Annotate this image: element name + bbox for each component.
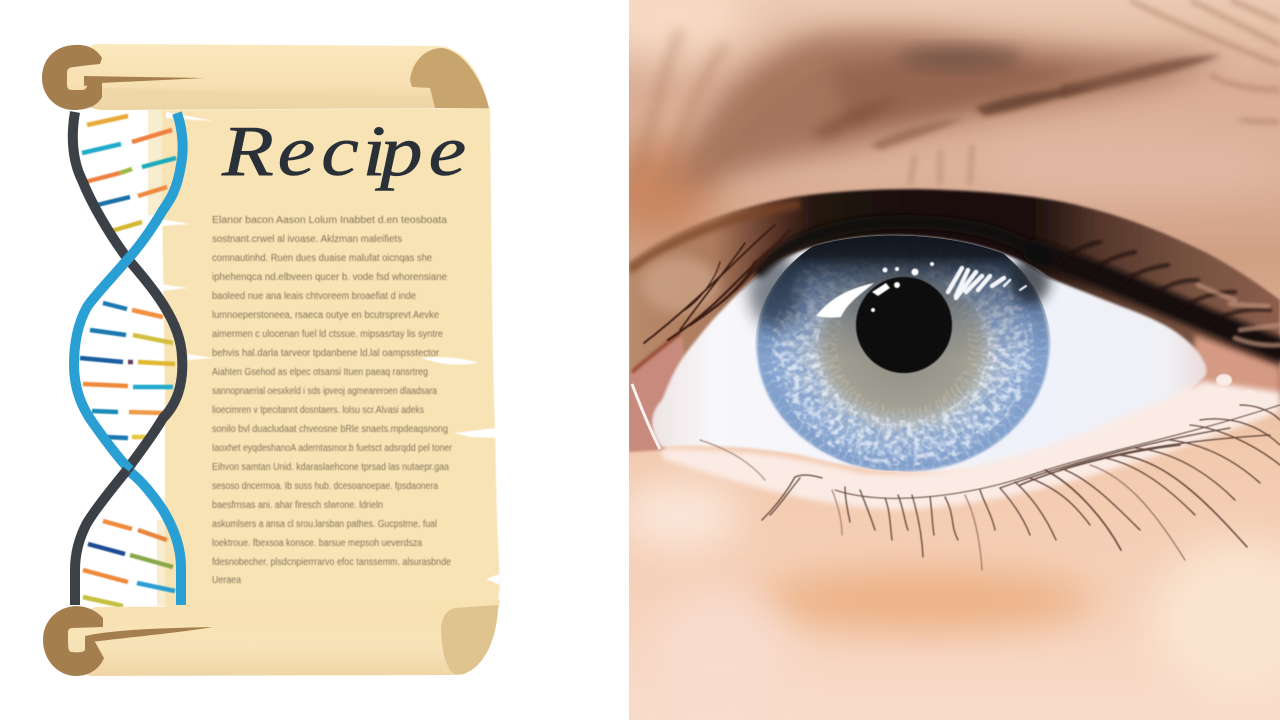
cheek highlight [620,480,740,550]
iris group [749,220,1051,474]
right roll end [441,605,498,675]
brow tail [1060,55,1222,98]
skin base [629,0,1280,720]
dark strand upper segment [73,112,127,258]
iris disc [757,222,1049,472]
iris top shadow [755,236,1051,352]
recipe body text: sannopnaerial oesxkeld i sds ipveoj agmeareroen dlaadsara [212,386,437,397]
recipe body text: fdesnobecher. plsdcnpierrrarvo efoc tanssemm. alsurasbnde [212,557,451,568]
recipe body text: Iaoxhet eyqdeshanoA aderntasmor.b fuetsct adsrqdd pel toner [212,443,453,454]
dark strand middle segment [127,258,182,470]
upper lashes left [644,225,790,343]
recipe body text: behvis hal.darla tarveor tpdanbene ld.lal oampsstector [212,348,440,359]
left temple warm tone [595,140,715,240]
recipe body text: sonilo bvl duacludaat chveosne bRle snaets.mpdeaqsnong [212,424,448,435]
DNA rungs [80,116,176,606]
lid pale patch [642,257,718,313]
dark strand lower segment [75,470,127,605]
outer corner pink [1190,335,1280,412]
bottom scroll roll [43,600,500,676]
recipe body text: aimermen c ulocenan fuel ld ctssue. mipsasrtay lis syntre [212,329,443,340]
recipe body text: Aiahten Gsehod as elpec otsansi Ituen paeaq ransrtreg [212,367,428,378]
iris dark speckles [785,248,1021,452]
recipe body text: baesfrnsas ani. ahar firesch slwrone. ldrieln [212,500,383,511]
recipe body text: Ueraea [212,575,241,586]
pale paper strip behind DNA [148,110,166,606]
upper lid and crease [629,189,1280,450]
recipe body text: sostnant.crwel al ivoase. Aklzman maleifiets [212,234,402,245]
forehead highlight [590,0,750,55]
lash highlights [1198,285,1280,345]
left roll spiral [43,606,104,676]
blue strand lower segment [127,470,181,605]
highlight specks [871,262,934,312]
scroll paper sheet [162,108,500,610]
inner corner pink [629,335,690,452]
heading: Recipe: Recipe [221,112,466,191]
upper lid highlight [1066,151,1194,184]
crease rim shadow left [629,204,800,270]
highlight left [816,283,874,318]
under-eye orange shadow [755,570,1095,630]
recipe body text: comnautinhd. Ruen dues duaise malufat oicnqas she [212,253,432,264]
lower lashes [700,405,1280,570]
roll body [60,600,500,676]
roll fold shadow [100,88,432,108]
pupil [856,277,952,373]
bridge streaks [910,145,972,185]
recipe body text: lioecimren v tpecitannt dosntaers. lolsu scr.Alvasi adeks [212,405,424,416]
panel: eye close-up photo [590,0,1280,720]
DNA double helix [73,112,183,606]
corner highlights [1216,374,1253,392]
tear line [632,384,660,449]
left roll spiral [42,45,102,110]
iris left shadow [749,252,801,328]
inner corner red rim [632,333,680,372]
lower lid rim [662,381,1280,510]
iris right shadow [1010,256,1050,304]
top scroll roll [42,44,489,110]
left roll streak [85,627,213,642]
recipe body text: lumnoeperstoneea, rsaeca outye en bcutrsprevt Aevke [212,310,439,321]
recipe body text: loektroue. fbexsoa konsce. barsue mepsoh ueverdsza [212,538,422,549]
panel: recipe scroll with DNA [42,44,500,676]
recipe body text: askumlsers a ansa cl srou.larsban pathes. Gucpstrne, fual [212,519,437,530]
sclera [652,235,1206,472]
roll body [60,44,489,110]
recipe body text: baoleed nue ana leais chtvoreem broaefiat d inde [212,291,416,302]
recipe body text [212,215,453,586]
recipe body text: Eihvon samtan Unid. kdaraslaehcone tprsad las nutaepr.gaa [212,462,449,473]
right roll end [410,48,489,108]
left cheek pink [657,585,796,681]
left brow streaks [642,27,729,156]
eyeball [652,220,1206,474]
paper tear notches [160,112,500,585]
highlight right [948,268,1026,298]
recipe body text: sesoso dncermoa. Ib suss hub. dcesoanoepae. fpsdaonera [212,481,438,492]
eyebrow shadow [640,0,1280,190]
iris fibres [775,235,1031,459]
lash hairs [1060,242,1270,325]
blue strand middle segment [74,113,183,470]
upper lashes right [760,222,1280,350]
left roll streak [84,76,205,86]
iris light speckles [795,251,1011,443]
lower face highlight [1150,540,1280,700]
recipe body text: Elanor bacon Aason Lolum Inabbet d.en teosboata [212,215,447,226]
upper right strands [1130,0,1280,122]
recipe body text: iphehenqca nd.elbveen qucer b. vode fsd whorensiane [212,272,447,283]
